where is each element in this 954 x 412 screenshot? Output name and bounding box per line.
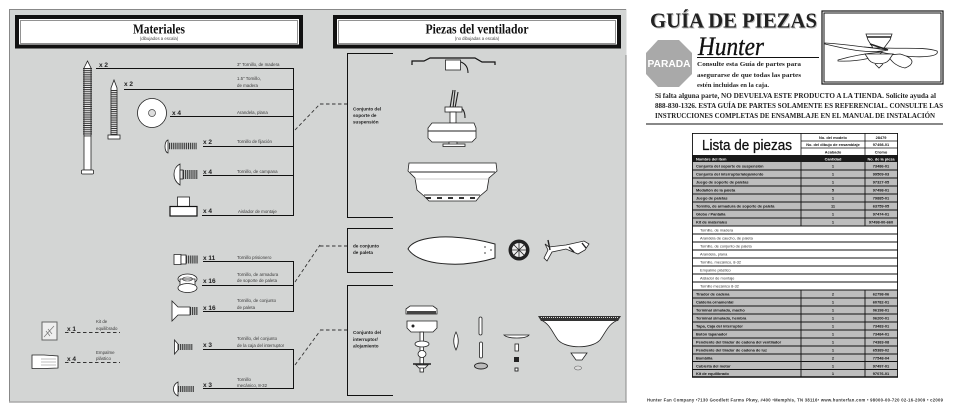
- table item names: Tornillo, mecánico, 8-32: [700, 260, 741, 264]
- icon: switch housing screw: [174, 340, 193, 354]
- table quantities: 1: [832, 371, 835, 376]
- material labels: mecánico, 8-32: [237, 383, 268, 388]
- table part numbers: 79885-01: [873, 196, 890, 200]
- table part numbers: [869, 164, 893, 376]
- icon: machine screw: [174, 382, 194, 396]
- table item names: Conjunto del soporte de suspensión: [696, 164, 764, 168]
- heading: Materiales: Materiales: [133, 22, 185, 38]
- table item names: Tapa, Caja del interruptor: [696, 324, 743, 328]
- table item names: Kit de equilibrado: [696, 371, 729, 376]
- part: blade medallion: [508, 240, 530, 260]
- leader lines: dashed extras: [65, 332, 120, 362]
- table item names: Kit de materiales: [696, 220, 727, 224]
- part: glass shade: [538, 316, 621, 370]
- group labels: Conjunto del: [353, 330, 381, 335]
- text: return warning: INSTRUCCIONES COMPLETAS DE ENSAMBLAJE EN EL MANUAL DE INSTALACIÓN: [655, 112, 935, 120]
- text: return warning: Si falta alguna parte, NO DEVUELVA ESTE PRODUCTO A LA TIENDA. Solicite ayuda al: [655, 92, 936, 100]
- material labels: Tornillo: [237, 377, 251, 382]
- table item names: Pendiente del tirador de cadena del ventilador: [696, 340, 782, 344]
- part: simulated terminals and cap: [474, 317, 488, 369]
- heading: Materiales: (dibujados a escala): [140, 36, 179, 41]
- table quantities: 1: [832, 363, 835, 368]
- table part numbers: 97497-01: [873, 363, 890, 368]
- material quantities: [67, 62, 216, 389]
- table lower gray rows: [692, 290, 898, 377]
- table header: [692, 133, 898, 162]
- material labels: de paleta: [237, 305, 256, 310]
- table item names: Arandela, plana: [700, 252, 728, 256]
- table quantities: 2: [832, 355, 835, 360]
- icon: fixing screw: [165, 140, 197, 153]
- footer: Hunter Fan Company •7130 Goodlett Farms Pkwy, #400 •Memphis, TN 38116• www.hunterfan.com • 98000-00-720 02-16-2009 • c2009: [647, 398, 944, 402]
- table header: Cantidad: [825, 156, 842, 161]
- table item names: Tirador de cadena: [696, 292, 730, 296]
- table header: No. del modelo: [819, 135, 848, 140]
- material labels: de madera: [237, 83, 259, 88]
- part: small cap and screws: [504, 335, 529, 371]
- icon: plastic wire nut: [32, 355, 58, 368]
- icon: short wood screw: [108, 80, 120, 139]
- table part numbers: 63759-05: [873, 204, 890, 208]
- group labels: [353, 106, 381, 348]
- table item names: Tornillo mecánico 8-32: [700, 284, 739, 288]
- group labels: suspensión: [353, 120, 379, 124]
- table part numbers: 73484-01: [873, 332, 890, 336]
- table quantities: 1: [832, 196, 835, 200]
- text: return warning: 888-830-1326. ESTA GUÍA DE PARTES SOLAMENTE ES REFERENCIAL. CONSULTE LAS: [655, 102, 943, 110]
- group labels: de paleta: [353, 250, 373, 255]
- table rows: gray and white bands: [692, 162, 898, 226]
- heading: Piezas del ventilador: [335, 17, 619, 46]
- table item names: Juego de paletas: [696, 196, 728, 200]
- material labels: Tornillo, de armadura: [237, 272, 279, 277]
- table part numbers: 97474-01: [873, 212, 890, 216]
- table part numbers: 06198-01: [873, 308, 890, 312]
- text: check parts notice: Consulte esta Guía de partes para: [697, 61, 802, 68]
- material quantities: x 1: [67, 326, 76, 333]
- material labels: plástico: [96, 356, 111, 361]
- table header: Acabado: [825, 149, 842, 154]
- text: return warning: [646, 92, 943, 124]
- title: Guía de piezas: GUÍA DE PIEZAS: [651, 10, 818, 34]
- material quantities: x 4: [203, 208, 212, 215]
- table item names: Aislador de montaje: [700, 276, 734, 280]
- table header: Lista de piezas: [702, 138, 792, 154]
- table item names: Arandela de caucho, de paleta: [700, 236, 754, 240]
- table part numbers: 77548-04: [873, 355, 890, 360]
- material quantities: x 16: [203, 305, 216, 312]
- table quantities: 2: [832, 292, 835, 296]
- table part numbers: 60782-01: [873, 300, 890, 304]
- table header: 97498-01: [873, 142, 890, 147]
- table part numbers: 73483-01: [873, 324, 890, 328]
- table item names: [696, 164, 782, 376]
- material labels: equilibrado: [96, 326, 118, 331]
- table item names: Juego de soporte de paletas: [696, 180, 749, 184]
- part: blade iron: [544, 240, 589, 261]
- material quantities: x 4: [172, 110, 181, 117]
- table quantities: 1: [832, 332, 835, 336]
- image: ceiling fan illustration: [822, 11, 943, 84]
- text: check parts notice: asegurarse de que todas las partes: [697, 72, 801, 79]
- material quantities: x 4: [203, 169, 212, 176]
- table quantities: [831, 164, 836, 376]
- table item names: Empalme plástico: [700, 268, 731, 272]
- material quantities: x 2: [203, 139, 212, 146]
- material labels: Aislador de montaje: [238, 209, 277, 214]
- heading: Piezas del ventilador: (no dibujadas a escala): [455, 36, 500, 41]
- table grid: [692, 133, 898, 377]
- table quantities: 1: [832, 324, 835, 328]
- table item names: Conjunto del interruptor/alojamiento: [696, 172, 764, 176]
- material quantities: x 3: [203, 382, 212, 389]
- material quantities: x 2: [99, 62, 108, 69]
- part: ceiling bracket: [412, 58, 495, 73]
- material labels: de soporte de paleta: [237, 278, 278, 283]
- table item names: Pendiente del tirador de cadena de luz: [696, 348, 767, 352]
- material quantities: x 2: [124, 81, 133, 88]
- table item names: Terminal simulado, macho: [696, 308, 745, 312]
- part: switch housing: [406, 306, 437, 372]
- group labels: Conjunto del: [353, 106, 381, 112]
- table quantities: 1: [832, 340, 835, 344]
- logo: Hunter: [697, 32, 819, 61]
- icon: mounting insulator: [170, 197, 197, 216]
- table part numbers: 73486-01: [873, 164, 890, 168]
- heading: Materiales: [17, 17, 301, 46]
- table item names: Cubierta del motor: [696, 363, 731, 368]
- table quantities: 1: [832, 348, 835, 352]
- icon: balance kit: [42, 322, 57, 340]
- material quantities: x 16: [203, 278, 216, 285]
- group labels: interruptor/: [353, 337, 378, 342]
- icon: long wood screw: [82, 61, 94, 174]
- table header: Nombre del ítem: [696, 156, 727, 161]
- table part numbers: 97327-05: [873, 180, 890, 184]
- table part numbers: 06200-01: [873, 316, 890, 320]
- table: parts list: [692, 133, 898, 377]
- logo: Hunter: Hunter: [697, 32, 765, 61]
- table item names: Tornillo, de madera: [700, 228, 734, 232]
- group labels: soporte de: [353, 113, 377, 118]
- material quantities: x 4: [67, 356, 76, 363]
- material labels: Empalme: [96, 350, 115, 355]
- leader lines: materials: [96, 68, 347, 388]
- table header: No. de la pieza: [867, 156, 895, 161]
- table quantities: 1: [832, 180, 835, 184]
- table item names: Bombilla: [696, 355, 713, 360]
- table item names: Medallón de la paleta: [696, 188, 736, 192]
- material quantities: x 3: [203, 342, 212, 349]
- part: motor with wires: [428, 90, 476, 146]
- brackets: fan part groups: [348, 54, 393, 396]
- icon: flat washer: [138, 98, 166, 128]
- part: fan blade: [408, 237, 495, 264]
- material labels: [96, 62, 285, 388]
- text: check parts notice: estén incluidas en la caja.: [697, 82, 769, 89]
- table header: No. del dibujo de ensamblaje: [806, 142, 861, 147]
- material labels: de la caja del interruptor: [237, 343, 285, 348]
- icon: blade screw: [172, 301, 198, 321]
- material quantities: x 11: [203, 255, 216, 262]
- table quantities: 1: [832, 164, 835, 168]
- panel: gray background: [9, 9, 627, 402]
- table header: Cromo: [875, 149, 888, 154]
- title: Guía de piezas: GUÍA DE PIEZAS: [650, 8, 817, 32]
- part: motor housing bell: [408, 163, 497, 201]
- icon: stop sign: [646, 40, 692, 87]
- material labels: Tornillo, de campana: [237, 169, 278, 174]
- table quantities: 1: [832, 220, 835, 224]
- part: pull chain pendant: [454, 332, 458, 350]
- text: check parts notice: [697, 61, 802, 89]
- table part numbers: 97498-01: [873, 188, 890, 192]
- table part numbers: 97498-00-660: [869, 220, 893, 224]
- group labels: alojamiento: [353, 344, 379, 348]
- material labels: Tornillo prisionero: [237, 255, 272, 260]
- material labels: Tornillo de fijación: [237, 139, 272, 144]
- table quantities: 11: [831, 204, 836, 208]
- table quantities: 1: [832, 316, 835, 320]
- heading: Piezas del ventilador: Piezas del ventilador: [426, 22, 528, 38]
- table quantities: 1: [832, 300, 835, 304]
- table item names: Tornillo, de armadura de soporte de paleta: [696, 204, 775, 208]
- table part numbers: 65389-02: [873, 348, 890, 352]
- material labels: Kit de: [96, 319, 108, 324]
- table header: 28479: [876, 135, 887, 140]
- table item names: Terminal simulado, hembra: [696, 316, 747, 320]
- table part numbers: 62798-06: [873, 292, 890, 296]
- table item names: Botón tapanador: [696, 332, 728, 336]
- icon: bell screw: [174, 164, 198, 185]
- table quantities: 1: [832, 308, 835, 312]
- group labels: de conjunto: [353, 244, 379, 248]
- material labels: Tornillo, del conjunto: [237, 336, 278, 341]
- table item names: Globo / Pantalla: [696, 212, 726, 216]
- icon: rubber washer: [178, 274, 197, 292]
- table part numbers: 74383-08: [873, 340, 890, 344]
- table item names: Caldería ornamental: [696, 300, 733, 304]
- material labels: Tornillo, de conjunto: [237, 298, 277, 303]
- table part numbers: 97076-01: [873, 371, 890, 376]
- table quantities: 1: [832, 212, 835, 216]
- material labels: Arandela, plana: [237, 110, 268, 115]
- material labels: 1.5" Tornillo,: [237, 76, 261, 81]
- icon: stop sign: PARADA: [648, 59, 690, 70]
- icon: set screw: [174, 254, 198, 264]
- table item names: Tornillo, de conjunto de paleta: [700, 244, 753, 248]
- table quantities: 5: [832, 188, 835, 192]
- table white rows: [692, 226, 898, 290]
- material labels: 3" Tornillo, de madera: [237, 62, 280, 67]
- table quantities: 1: [832, 172, 835, 176]
- table part numbers: 99509-03: [873, 172, 890, 176]
